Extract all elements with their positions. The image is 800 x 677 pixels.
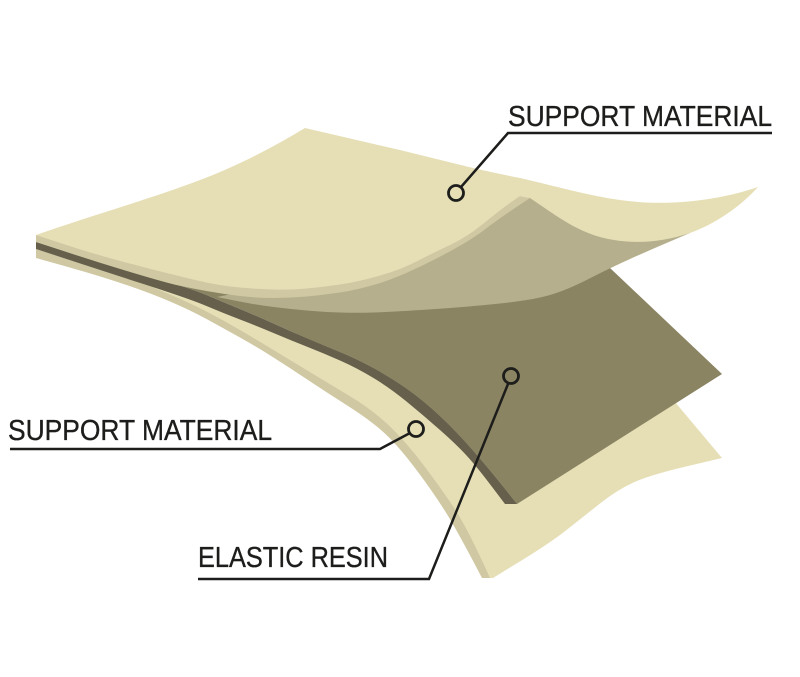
panel: top support sheet — [36, 128, 758, 313]
resin face — [36, 242, 722, 504]
marker — [504, 368, 518, 384]
label: SUPPORT MATERIAL — [8, 415, 272, 447]
leader line — [198, 384, 508, 579]
sheet edge — [36, 249, 500, 578]
label: SUPPORT MATERIAL — [508, 101, 772, 133]
callout: bottom support material — [8, 415, 424, 449]
marker — [448, 186, 464, 200]
panel: elastic resin layer — [36, 242, 722, 504]
peeled underside — [217, 197, 690, 313]
marker — [408, 422, 424, 436]
panel: bottom support sheet — [36, 249, 722, 578]
leader line — [461, 133, 772, 187]
sheet face — [150, 286, 722, 578]
callout: top support material — [448, 101, 772, 200]
callout: elastic resin — [198, 368, 518, 579]
sheet top face — [36, 128, 758, 290]
resin edge — [36, 242, 517, 504]
sheet edge — [36, 196, 530, 298]
label: ELASTIC RESIN — [198, 542, 388, 574]
leader line — [10, 433, 410, 449]
